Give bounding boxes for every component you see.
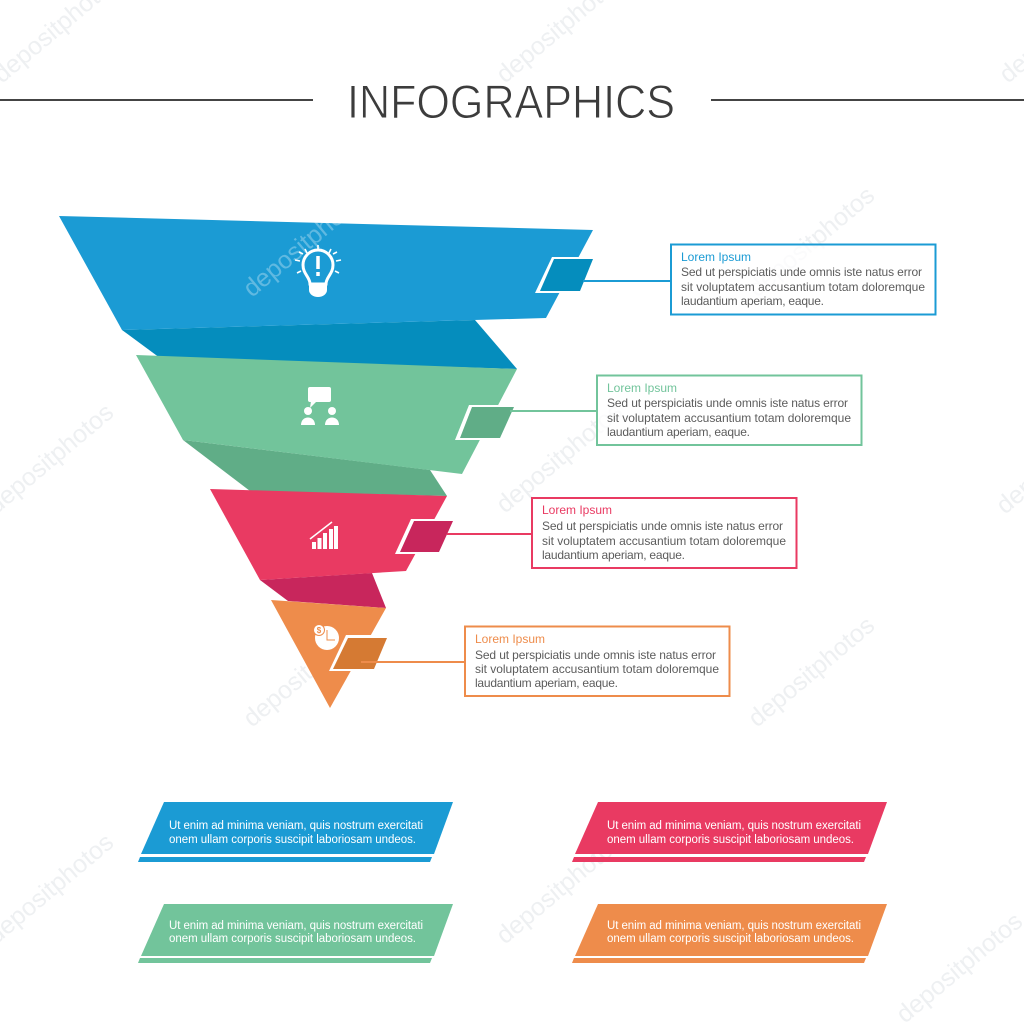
watermarks: depositphotos bbox=[743, 611, 880, 733]
banner: green bbox=[138, 904, 453, 963]
callout 2: Lorem Ipsum bbox=[607, 381, 677, 395]
banner: red: Ut enim ad minima veniam, quis nostrum exercitati bbox=[607, 820, 861, 832]
watermarks: depositphotos bbox=[491, 397, 628, 519]
funnel tier 4: orange bbox=[271, 600, 387, 708]
callout 1: Sed ut perspiciatis unde omnis iste natus error bbox=[681, 265, 922, 279]
callout 3 bbox=[447, 498, 796, 568]
callout 3: Sed ut perspiciatis unde omnis iste natus error bbox=[542, 519, 783, 533]
title: INFOGRAPHICS bbox=[347, 75, 675, 128]
callout 4: sit voluptatem accusantium totam doloremque bbox=[475, 662, 719, 676]
callout 1: laudantium aperiam, eaque. bbox=[681, 294, 824, 308]
banner: red: onem ullam corporis suscipit laboriosam undeos. bbox=[607, 834, 854, 846]
callout 1: Lorem Ipsum bbox=[681, 250, 751, 264]
callout 4: Lorem Ipsum bbox=[475, 632, 545, 646]
banner: orange bbox=[572, 904, 887, 963]
funnel tier 2: green bbox=[136, 355, 517, 496]
icon: people with speech bubble bbox=[301, 387, 339, 425]
icon: clock with dollar: $ bbox=[317, 626, 322, 635]
callout 2: sit voluptatem accusantium totam doloremque bbox=[607, 411, 851, 425]
callout 3: Lorem Ipsum bbox=[542, 503, 612, 517]
callout 4 bbox=[361, 626, 730, 696]
funnel bbox=[59, 216, 593, 708]
icon: clock with dollar bbox=[314, 624, 339, 650]
funnel tier 1: blue bbox=[59, 181, 593, 369]
callout 1 bbox=[583, 244, 936, 314]
banner: blue: onem ullam corporis suscipit laboriosam undeos. bbox=[169, 834, 416, 846]
callout 2: Sed ut perspiciatis unde omnis iste natus error bbox=[607, 396, 848, 410]
callout 1: sit voluptatem accusantium totam doloremque bbox=[681, 280, 925, 294]
banner: blue bbox=[138, 802, 453, 862]
funnel tier 1: blue: depositphotos bbox=[238, 181, 375, 303]
callout 2: laudantium aperiam, eaque. bbox=[607, 425, 750, 439]
callout 3: laudantium aperiam, eaque. bbox=[542, 548, 685, 562]
callout 3: sit voluptatem accusantium totam doloremque bbox=[542, 534, 786, 548]
banner: orange: Ut enim ad minima veniam, quis nostrum exercitati bbox=[607, 920, 861, 932]
callout 2 bbox=[510, 376, 862, 445]
banner: orange: onem ullam corporis suscipit laboriosam undeos. bbox=[607, 933, 854, 945]
banner: blue: Ut enim ad minima veniam, quis nostrum exercitati bbox=[169, 820, 423, 832]
callout 4: laudantium aperiam, eaque. bbox=[475, 676, 618, 690]
watermarks: depositphotos bbox=[491, 828, 628, 950]
funnel tier 4: orange: depositphotos bbox=[238, 611, 375, 733]
watermarks: depositphotos bbox=[238, 611, 375, 733]
watermarks: depositphotos bbox=[743, 181, 880, 303]
banner: red bbox=[572, 802, 887, 862]
icon: bar chart bbox=[310, 522, 338, 549]
banner: green: Ut enim ad minima veniam, quis nostrum exercitati bbox=[169, 920, 423, 932]
callout 4: Sed ut perspiciatis unde omnis iste natus error bbox=[475, 648, 716, 662]
icon: light bulb bbox=[295, 245, 341, 297]
funnel tier 3: red bbox=[210, 489, 453, 608]
banner: green: onem ullam corporis suscipit laboriosam undeos. bbox=[169, 933, 416, 945]
